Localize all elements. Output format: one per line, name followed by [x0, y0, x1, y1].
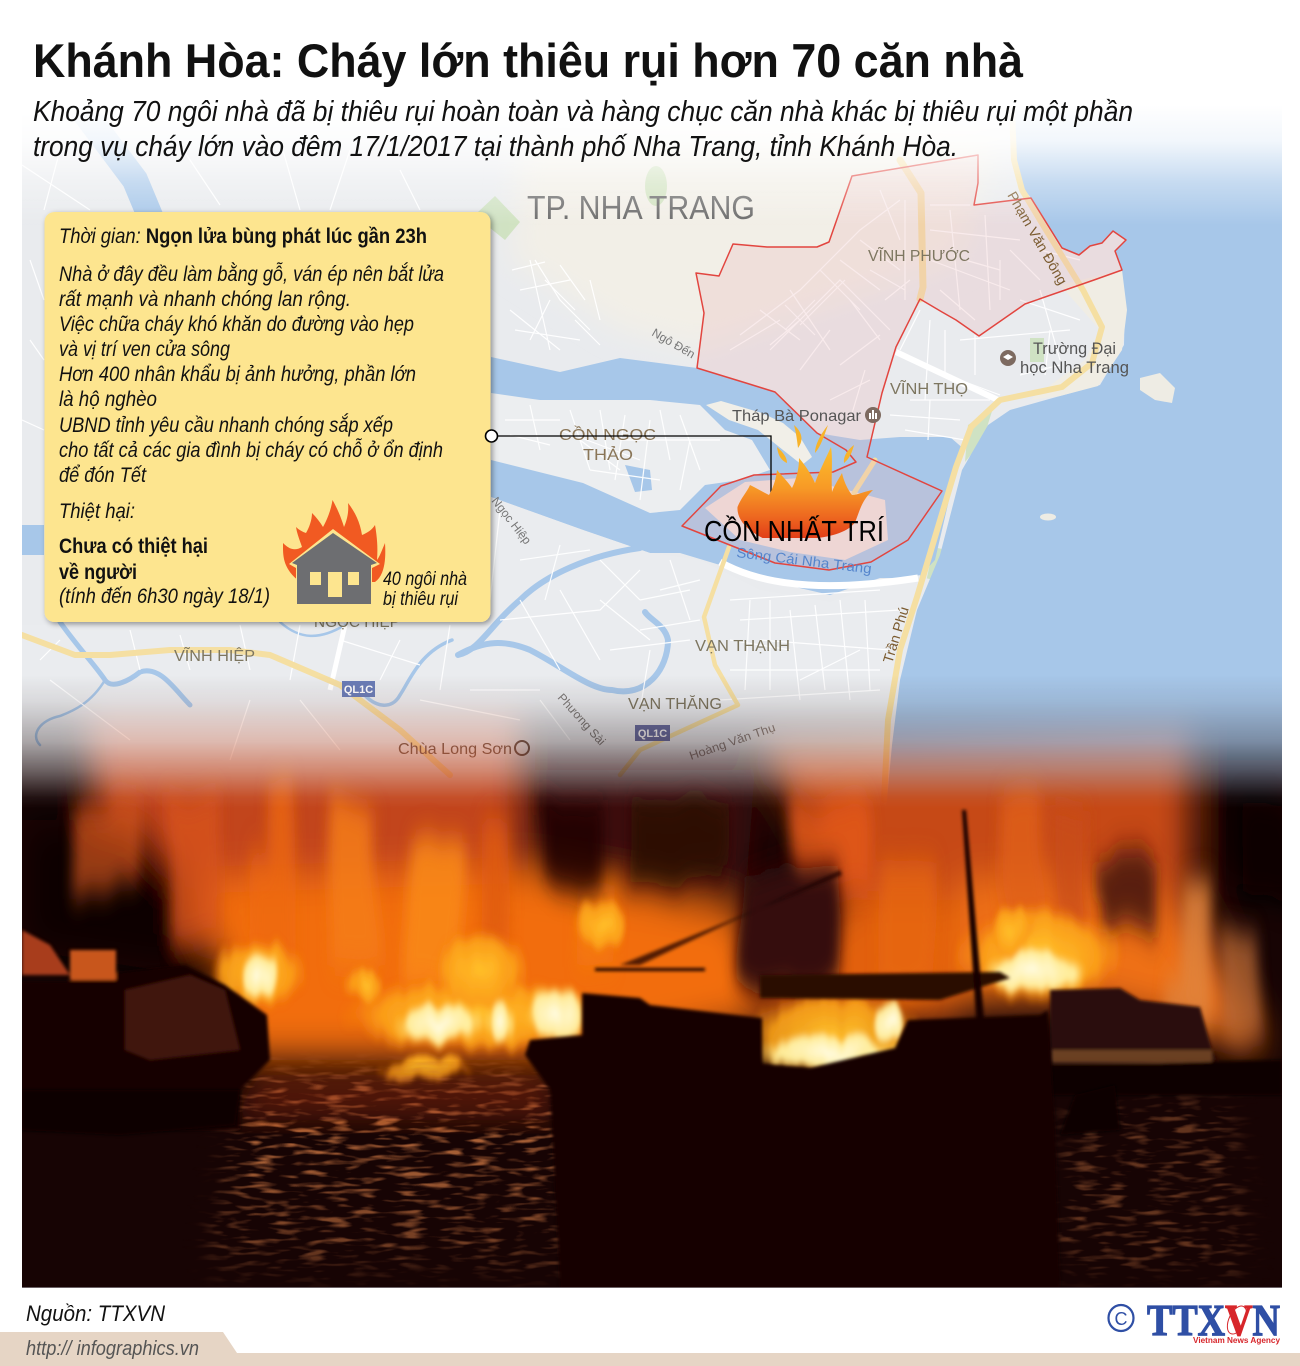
subtitle: trong vụ cháy lớn vào đêm 17/1/2017 tại thành phố Nha Trang, tỉnh Khánh Hòa. [33, 131, 958, 163]
details list [59, 263, 444, 487]
top fade over the map [22, 100, 1282, 225]
road and place names: TP. NHA TRANG [527, 189, 755, 226]
road and place names: CỒN NGỌC [559, 425, 656, 444]
illustration: flame on the island [737, 425, 873, 538]
wider white roads [330, 352, 998, 690]
logo: TTXVN: C [1114, 1309, 1128, 1329]
details list: Nhà ở đây đều làm bằng gỗ, ván ép nên bắt lửa [59, 263, 444, 286]
details list: Việc chữa cháy khó khăn do đường vào hẹp [59, 313, 414, 336]
road and place names: Sông Cái Nha Trang [736, 544, 873, 577]
road and place names: Ngô Đến [650, 325, 698, 361]
road and place names: Ngọc Hiệp [489, 494, 534, 547]
casualties: Chưa có thiệt hại [59, 535, 208, 558]
road and place names [174, 188, 1129, 763]
green patches [478, 166, 1044, 579]
subtitle [33, 96, 1133, 163]
silhouette: right house [1040, 988, 1282, 1095]
icon: university marker [1000, 350, 1016, 366]
road and place names: Phương Sài [555, 691, 608, 748]
details list: là hộ nghèo [59, 388, 157, 411]
panel: fire details [44, 212, 490, 622]
flame streaks [75, 780, 1260, 1040]
details list: và vị trí ven cửa sông [59, 338, 230, 361]
damage heading: Thiệt hại: [59, 500, 135, 523]
photo: fire at the waterfront [22, 670, 1290, 1290]
water reflection [200, 1058, 1256, 1287]
details list: Hơn 400 nhân khẩu bị ảnh hưởng, phần lớn [59, 363, 416, 386]
houses burned note: 40 ngôi nhà [383, 569, 467, 590]
road and place names: VĨNH HIỆP [174, 645, 255, 665]
photo bottom edge [22, 1287, 1282, 1288]
sea [886, 100, 1282, 810]
dark smoke [530, 800, 1290, 1000]
map of Nha Trang [22, 100, 1282, 810]
casualties: (tính đến 6h30 ngày 18/1) [59, 585, 270, 608]
road and place names: Trần Phú [880, 605, 912, 665]
footer band [0, 1332, 1300, 1366]
road and place names: VĨNH PHƯỚC [868, 245, 970, 265]
road and place names: học Nha Trang [1020, 358, 1129, 377]
road and place names: NGỌC HIỆP [314, 612, 400, 631]
road shield: QL1C west [342, 681, 375, 697]
road shield: QL1C west: QL1C [344, 684, 373, 696]
road and place names: THẢO [583, 445, 633, 464]
details list: để đón Tết [59, 464, 147, 487]
icon: tower marker [865, 407, 881, 423]
silhouette: fishing boat [525, 810, 1060, 1288]
road and place names: VẠN THẠNH [695, 638, 790, 655]
casualties: về người [59, 561, 137, 584]
rivers [491, 357, 965, 595]
icon: burning house [283, 500, 385, 606]
details list: rất mạnh và nhanh chóng lan rộng. [59, 288, 351, 311]
road and place names: Phạm Văn Đông [1004, 188, 1071, 287]
silhouette: pole and small boat [1060, 1085, 1120, 1135]
pink ward fill and red boundary [682, 155, 1126, 570]
icon: pagoda marker [515, 741, 529, 755]
small islands [1140, 373, 1175, 403]
time line: Thời gian: Ngọn lửa bùng phát lúc gần 23h [59, 225, 427, 248]
road and place names: VĨNH THỌ [890, 378, 968, 398]
road and place names: Chùa Long Sơn [398, 741, 512, 758]
source: Nguồn: TTXVN [26, 1301, 165, 1326]
houses burned note [383, 569, 467, 610]
minor roads [22, 140, 1080, 760]
road and place names: Trường Đại [1033, 339, 1116, 358]
subtitle: Khoảng 70 ngôi nhà đã bị thiêu rụi hoàn toàn và hàng chục căn nhà khác bị thiêu rụi một phần [33, 96, 1133, 128]
details list: cho tất cả các gia đình bị cháy có chỗ ở ổn định [59, 439, 443, 462]
casualties [59, 535, 270, 608]
broad glow [22, 700, 1290, 1060]
logo: TTXVN: Vietnam News Agency [1193, 1336, 1281, 1345]
highways [22, 110, 1102, 800]
bright fire cores [210, 897, 1125, 1083]
houses burned note: bị thiêu rụi [383, 589, 459, 610]
title: Khánh Hòa: Cháy lớn thiêu rụi hơn 70 căn nhà [33, 34, 1024, 87]
south urban land [212, 497, 920, 700]
details list: UBND tỉnh yêu cầu nhanh chóng sắp xếp [59, 414, 393, 437]
road shield: QL1C east: QL1C [638, 728, 667, 740]
coastal land rim [1030, 270, 1127, 400]
callout connector line [497, 436, 771, 513]
road and place names: Tháp Bà Ponagar [732, 408, 862, 425]
callout marker [486, 430, 498, 442]
silhouette: left houses [22, 930, 270, 1130]
logo: TTXVN: TTXVN [1147, 1296, 1280, 1345]
road and place names: Hoàng Văn Thụ [687, 720, 777, 763]
land islands [491, 393, 770, 513]
road and place names: VẠN THĂNG [628, 694, 722, 713]
label: island name: CỒN NHẤT TRÍ [704, 514, 885, 548]
road shield: QL1C east [635, 725, 670, 741]
website: http:// infographics.vn [26, 1338, 199, 1360]
